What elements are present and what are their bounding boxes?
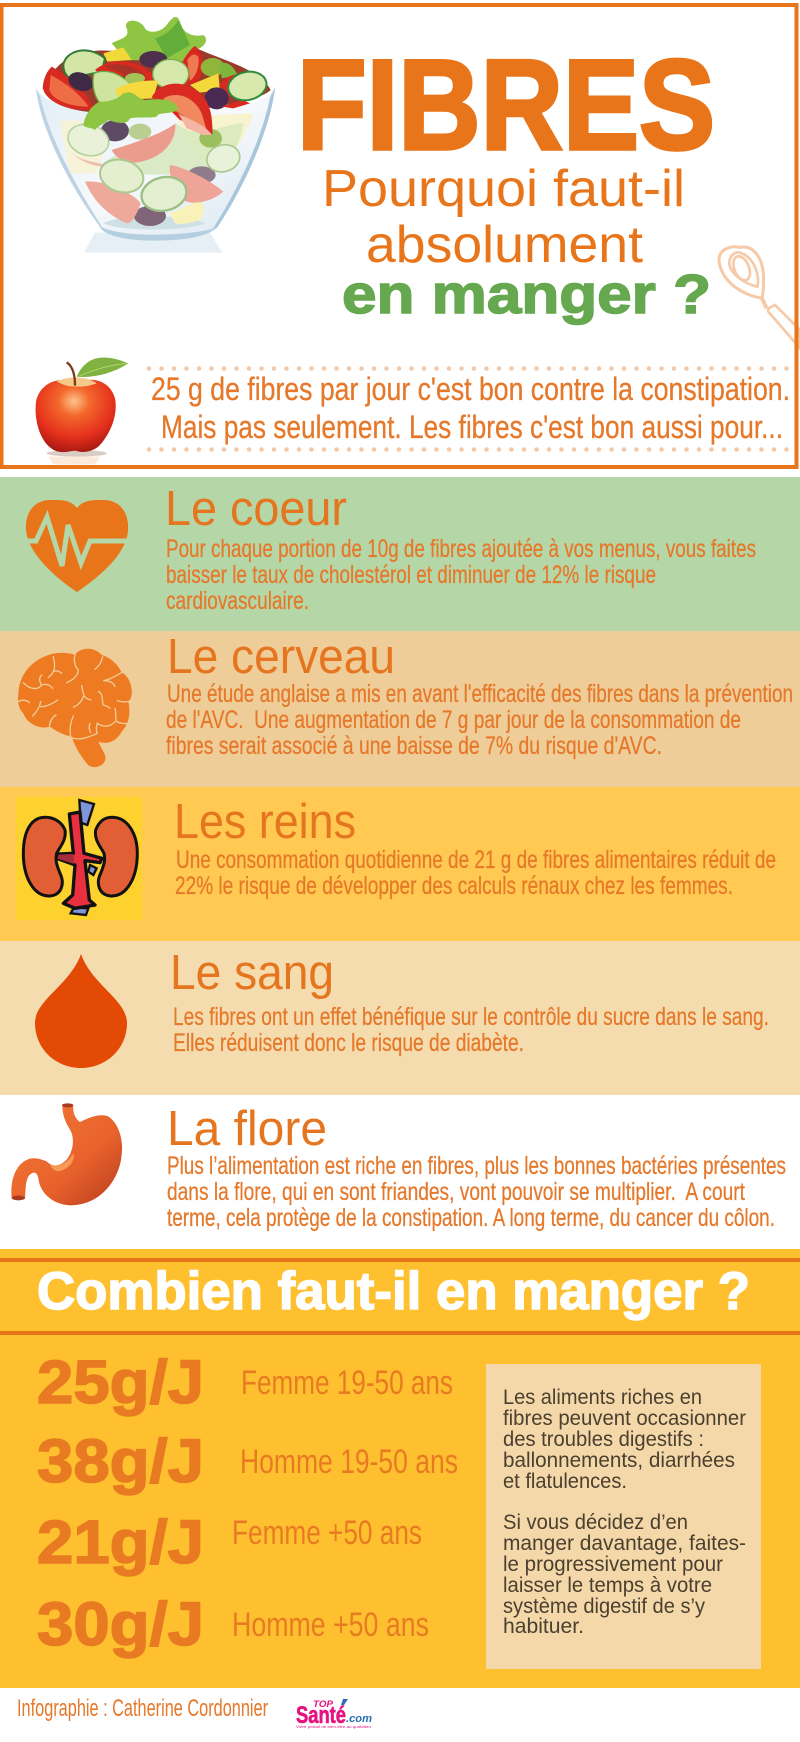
note box: fibres peuvent occasionner [503, 1407, 746, 1430]
heading: Les reins [174, 795, 356, 849]
amount: 38g/J: Homme 19-50 ans [240, 1443, 458, 1481]
subtitle line 2: absolument [366, 216, 644, 274]
subtitle line 3: en manger ? [342, 263, 711, 325]
panel: les reins [0, 787, 800, 941]
note box: système digestif de s’y [503, 1595, 705, 1618]
subtitle [322, 160, 711, 325]
amount: 25g/J: 25g/J [37, 1348, 204, 1416]
note box: des troubles digestifs : [503, 1428, 704, 1451]
amount: 25g/J [37, 1348, 453, 1416]
amount: 30g/J: 30g/J [37, 1590, 204, 1658]
body text [166, 535, 756, 615]
panel: le cerveau [0, 630, 800, 787]
note box: le progressivement pour [503, 1553, 723, 1576]
icon: whisk [719, 247, 800, 348]
icon: stomach [11, 1103, 122, 1205]
body text: fibres serait associé à une baisse de 7% du risque d'AVC. [166, 732, 662, 760]
heading: Le sang [170, 946, 334, 1000]
icon: kidneys [16, 797, 142, 920]
icon: brain [18, 649, 132, 767]
amount: 21g/J: 21g/J [37, 1508, 204, 1576]
amount: 21g/J: Femme +50 ans [232, 1514, 422, 1552]
panel: how much to eat [0, 1249, 800, 1688]
heading: Combien faut-il en manger ? [37, 1262, 750, 1321]
note box: manger davantage, faites- [503, 1532, 746, 1555]
note box: et flatulences. [503, 1470, 627, 1493]
panel: le coeur [0, 477, 800, 631]
footer [0, 1688, 800, 1742]
callout: daily fibre intake [149, 368, 798, 450]
heading: Le cerveau [167, 630, 395, 684]
body text [173, 1003, 769, 1057]
body text: cardiovasculaire. [166, 587, 309, 615]
note box: laisser le temps à votre [503, 1574, 712, 1597]
credit: Infographie : Catherine Cordonnier [17, 1695, 268, 1722]
amount: 21g/J [37, 1508, 422, 1576]
heading: La flore [167, 1102, 327, 1156]
amount: 30g/J [37, 1590, 429, 1658]
note box: habituer. [503, 1615, 584, 1638]
note box [486, 1364, 761, 1669]
heading: Le coeur [165, 482, 347, 536]
amount: 30g/J: Homme +50 ans [232, 1606, 429, 1644]
icon: salad bowl [36, 17, 275, 253]
logo: Top Santé: .com [346, 1713, 372, 1725]
amount: 38g/J: 38g/J [37, 1427, 204, 1495]
body text [166, 680, 793, 760]
panel: le sang [0, 941, 800, 1095]
frame border [2, 5, 796, 467]
icon: heart with pulse [24, 500, 130, 592]
body text [175, 846, 776, 900]
note box: Les aliments riches en [503, 1386, 702, 1409]
panel: header [0, 0, 800, 477]
note box: ballonnements, diarrhées [503, 1449, 735, 1472]
logo: Top Santé: TOP [313, 1699, 334, 1709]
body text: Elles réduisent donc le risque de diabète. [173, 1029, 524, 1057]
amount: 38g/J [37, 1427, 458, 1495]
amount: 25g/J: Femme 19-50 ans [241, 1364, 453, 1402]
logo: Top Santé: Votre portail de bien-être au quotidien [296, 1725, 371, 1729]
salad top [43, 17, 271, 135]
body text [167, 1152, 786, 1232]
note box: Si vous décidez d’en [503, 1511, 688, 1534]
body text: baisser le taux de cholestérol et diminuer de 12% le risque [166, 561, 656, 589]
icon: apple [36, 358, 128, 464]
subtitle line 1: Pourquoi faut-il [322, 160, 685, 218]
main title: FIBRES [297, 34, 715, 177]
logo: Top Santé: Santé [296, 1702, 346, 1729]
icon: blood drop [35, 954, 127, 1068]
panel: la flore [0, 1095, 800, 1249]
